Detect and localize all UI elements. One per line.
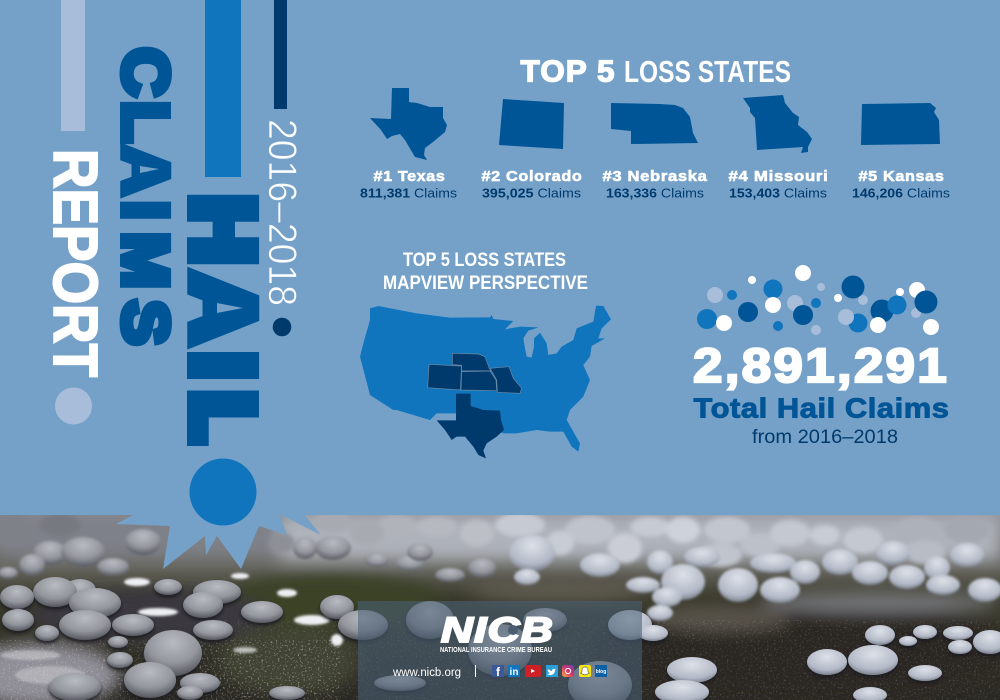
claims: Kansas: 146,206 Claims (852, 186, 951, 200)
icon: blog: blog (596, 669, 606, 675)
ribbon starburst (116, 514, 321, 569)
title: date range: 2016–2018 (260, 119, 304, 306)
ribbon medal circle (190, 458, 256, 526)
map: Missouri (490, 367, 522, 393)
title: HAIL: HAIL (174, 195, 271, 449)
map: Kansas (461, 371, 497, 391)
total claims label: Total Hail Claims (694, 392, 950, 424)
icon: twitter (546, 665, 558, 677)
decorative bar: navy (274, 0, 287, 109)
label: Nebraska: #3 Nebraska (602, 168, 708, 185)
map: Nebraska (452, 353, 491, 371)
state: Colorado (482, 99, 582, 200)
label: Colorado: #2 Colorado (482, 168, 582, 185)
date range caption: from 2016–2018 (752, 427, 898, 448)
NICB logo: NICB (441, 611, 554, 650)
social icons (492, 665, 607, 679)
map: Colorado (428, 364, 462, 390)
state: Nebraska (602, 103, 708, 200)
claims: Colorado: 395,025 Claims (482, 186, 582, 200)
website: www.nicb.org (392, 667, 461, 679)
dot: light (55, 388, 92, 424)
NICB logo: NATIONAL INSURANCE CRIME BUREAU (440, 647, 552, 654)
heading: top 5 loss states: TOP 5 (520, 54, 616, 88)
map: United States with top 5 states highlighted (360, 306, 611, 458)
icon: linkedin: in (510, 667, 518, 678)
heading: mapview perspective: MAPVIEW PERSPECTIVE (383, 273, 588, 294)
decorative bar: light (61, 0, 85, 131)
claims: Missouri: 153,403 Claims (729, 186, 828, 200)
label: Missouri: #4 Missouri (728, 168, 828, 185)
icon: instagram (562, 665, 574, 677)
map: US outline (360, 306, 611, 452)
footer overlay panel (358, 601, 642, 700)
map: Texas (437, 394, 504, 458)
icon: snapchat (579, 665, 591, 677)
claims: Nebraska: 163,336 Claims (606, 186, 705, 200)
icon: Texas silhouette (370, 88, 447, 160)
claims: Texas: 811,381 Claims (360, 186, 458, 200)
icon: Colorado silhouette (499, 99, 564, 149)
icon: Nebraska silhouette (611, 103, 698, 144)
heading: mapview perspective (383, 250, 588, 294)
icon: Missouri silhouette (743, 95, 812, 153)
state: Texas (360, 88, 458, 200)
icon: Kansas silhouette (861, 103, 940, 145)
icon: facebook: f (496, 665, 501, 679)
dot: navy (273, 318, 291, 336)
heading: top 5 loss states (520, 54, 791, 89)
total claims number: 2,891,291 (693, 340, 949, 393)
state: Missouri (728, 95, 828, 200)
title: CLAIMS: CLAIMS (110, 48, 182, 345)
label: Texas: #1 Texas (374, 168, 446, 185)
heading: mapview perspective: TOP 5 LOSS STATES (403, 250, 566, 271)
icon: youtube (525, 665, 541, 677)
bubble cluster (697, 265, 939, 335)
heading: top 5 loss states: LOSS STATES (624, 54, 791, 89)
decorative bar: blue (205, 0, 241, 177)
photo: hailstones on wet pavement (0, 513, 1000, 700)
label: Kansas: #5 Kansas (858, 168, 944, 185)
state: Kansas (852, 103, 951, 200)
title: REPORT: REPORT (40, 149, 109, 377)
